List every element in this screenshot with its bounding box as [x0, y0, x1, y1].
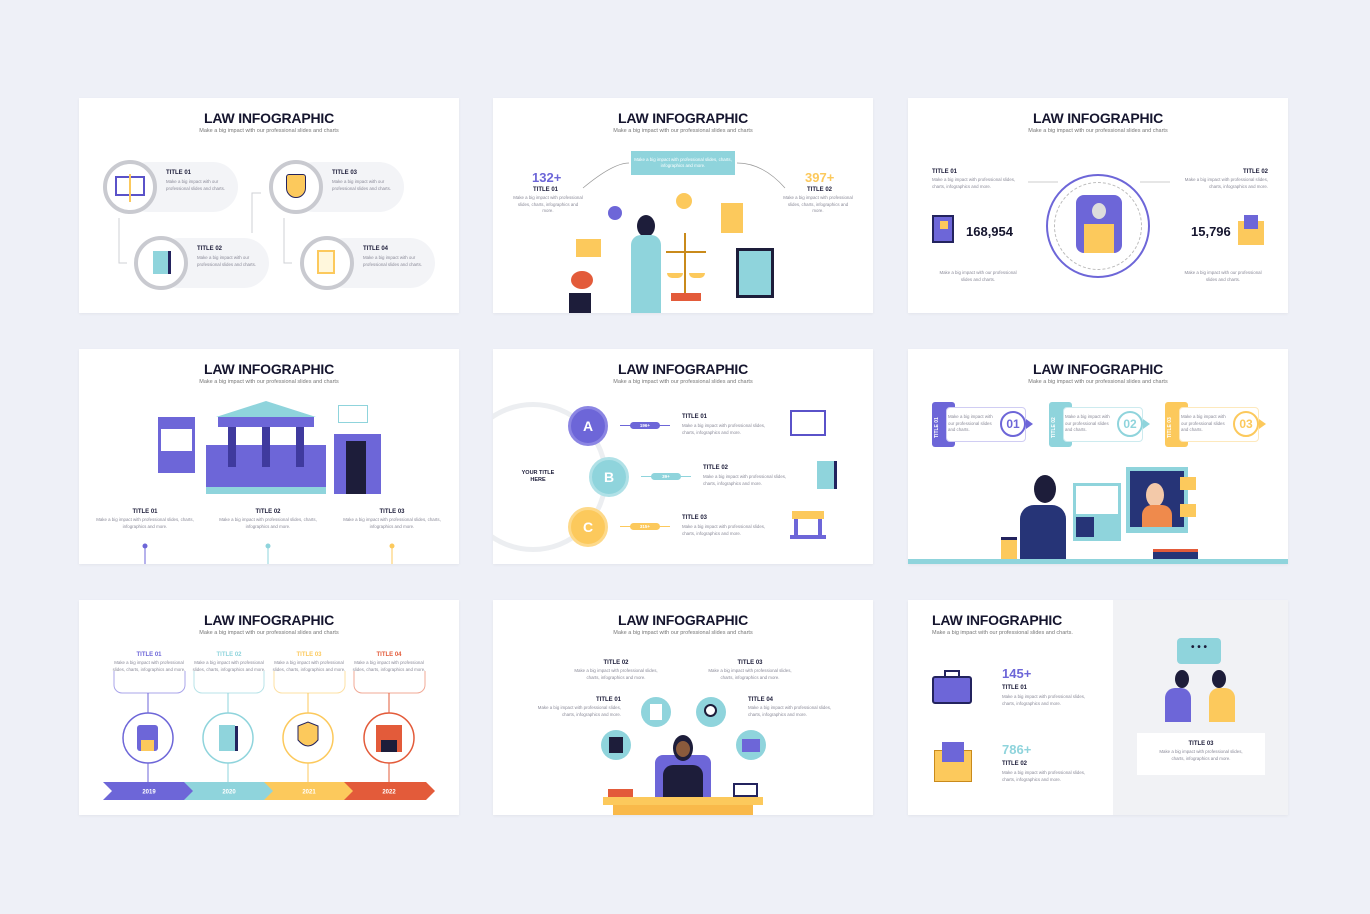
- text title 01: [538, 696, 621, 717]
- right grey panel: [1113, 600, 1289, 815]
- step 2: TITLE 02: [197, 246, 222, 252]
- subtitle: Make a big impact with our professional slides and charts: [1028, 128, 1168, 134]
- text title 04: TITLE 04: [748, 697, 773, 703]
- card 01: TITLE 01: [934, 417, 940, 438]
- item C: Make a big impact with professional slides, charts, infographics and more.: [682, 524, 765, 536]
- item 3: [343, 508, 441, 529]
- step 3: Make a big impact with our professional slides and charts.: [332, 179, 391, 191]
- card title 03: TITLE 03: [1188, 741, 1214, 747]
- illustration: lady justice: [569, 193, 774, 313]
- illustration: lawyer and screens: [1001, 467, 1198, 559]
- stat 1: [932, 666, 1085, 706]
- stat 2: [934, 742, 1085, 782]
- title: LAW INFOGRAPHIC: [618, 361, 748, 377]
- stat 2: TITLE 02: [1002, 761, 1027, 767]
- slide 6: numbered cards: [908, 349, 1288, 564]
- text right: [1185, 168, 1268, 189]
- item A: Make a big impact with professional slides, charts, infographics and more.: [682, 423, 765, 435]
- step 3: TITLE 03: [332, 170, 357, 176]
- stat left: [513, 170, 583, 213]
- stat right: 397+: [805, 170, 834, 185]
- timeline graphics: [103, 671, 435, 800]
- item B: 39+: [662, 474, 670, 479]
- stat right: TITLE 02: [807, 187, 832, 193]
- item A: [568, 406, 826, 446]
- step 4: [300, 236, 435, 290]
- item B: B: [604, 469, 614, 485]
- subtitle: Make a big impact with our professional slides and charts: [613, 128, 753, 134]
- item A: A: [583, 418, 593, 434]
- subtitle: Make a big impact with our professional slides and charts: [199, 128, 339, 134]
- card 02: [1049, 402, 1150, 447]
- item B: TITLE 02: [703, 465, 728, 471]
- subtitle: Make a big impact with our professional slides and charts: [613, 379, 753, 385]
- item 1: TITLE 01: [132, 509, 158, 515]
- slide 3: statistics: Make a big impact with our professional slides and charts.: [1184, 270, 1262, 282]
- text title 04: [748, 696, 831, 717]
- card 02: Make a big impact with our professional slides and charts.: [1065, 414, 1110, 432]
- subtitle: Make a big impact with our professional slides and charts: [199, 379, 339, 385]
- card 01: 01: [1006, 417, 1020, 431]
- center label: HERE: [530, 477, 546, 483]
- text 2: TITLE 02: [216, 652, 242, 658]
- text title 01: TITLE 01: [596, 697, 621, 703]
- top callout box: [631, 151, 735, 175]
- stat left: TITLE 01: [533, 187, 558, 193]
- text title 02: TITLE 02: [603, 660, 628, 666]
- top callout box: Make a big impact with professional slides, charts, infographics and more.: [634, 157, 732, 168]
- stat 2: [1191, 215, 1264, 245]
- subtitle: Make a big impact with our professional slides and charts: [1028, 379, 1168, 385]
- icon circles: [601, 697, 766, 760]
- step 2: [134, 236, 269, 290]
- text 4: TITLE 04: [376, 652, 402, 658]
- text 4: Make a big impact with professional slides, charts, infographics and more.: [353, 660, 425, 672]
- card 03: TITLE 03: [1167, 417, 1173, 438]
- item 1: Make a big impact with professional slides, charts, infographics and more.: [96, 517, 194, 529]
- text left: Make a big impact with professional slides, charts, infographics and more.: [932, 177, 1015, 189]
- slide 1: process steps: [79, 98, 459, 313]
- stat 1: [932, 215, 1013, 243]
- connectors: [118, 192, 292, 264]
- item C: [568, 507, 826, 547]
- timeline graphics: 2022: [382, 790, 396, 796]
- item C: TITLE 03: [682, 515, 707, 521]
- text 1: TITLE 01: [136, 652, 162, 658]
- item 3: Make a big impact with professional slides, charts, infographics and more.: [343, 517, 441, 529]
- timeline graphics: 2019: [142, 790, 156, 796]
- card title 03: [1137, 733, 1265, 775]
- stat 1: TITLE 01: [1002, 685, 1027, 691]
- text title 02: Make a big impact with professional slides, charts, infographics and more.: [574, 668, 658, 680]
- text 1: Make a big impact with professional slides, charts, infographics and more.: [113, 660, 185, 672]
- text title 03: TITLE 03: [737, 660, 762, 666]
- text left: [932, 168, 1015, 189]
- title: LAW INFOGRAPHIC: [618, 110, 748, 126]
- item C: 315+: [640, 524, 650, 529]
- title: LAW INFOGRAPHIC: [204, 361, 334, 377]
- card 02: 02: [1123, 417, 1137, 431]
- card 01: Make a big impact with our professional slides and charts.: [948, 414, 993, 432]
- step 2: Make a big impact with our professional slides and charts.: [197, 255, 256, 267]
- ring: [458, 402, 608, 552]
- text title 03: [708, 660, 792, 680]
- timeline graphics: 2021: [302, 790, 316, 796]
- step 4: Make a big impact with our professional slides and charts.: [363, 255, 422, 267]
- timeline graphics: 2020: [222, 790, 236, 796]
- stat 2: Make a big impact with professional slides, charts, infographics and more.: [1002, 770, 1085, 782]
- step 1: TITLE 01: [166, 170, 191, 176]
- text 4: [352, 652, 425, 672]
- text right: TITLE 02: [1243, 169, 1268, 175]
- title: LAW INFOGRAPHIC: [1033, 110, 1163, 126]
- item C: C: [583, 519, 593, 535]
- stat 1: 168,954: [966, 224, 1013, 239]
- slide 4: courthouse: [79, 349, 459, 564]
- step 3: [269, 160, 404, 214]
- title: LAW INFOGRAPHIC: [932, 612, 1062, 628]
- step 4: TITLE 04: [363, 246, 388, 252]
- stat right: Make a big impact with professional slides, charts, infographics and more.: [783, 195, 853, 213]
- slide 8: judge: [493, 600, 873, 815]
- text left: TITLE 01: [932, 169, 957, 175]
- item 1: [96, 508, 194, 529]
- stat left: Make a big impact with professional slides, charts, infographics and more.: [513, 195, 583, 213]
- text title 02: [574, 660, 658, 680]
- text 2: [192, 652, 265, 672]
- slide 7: timeline: [79, 600, 459, 815]
- illustration: courthouse: [158, 401, 381, 494]
- item B: Make a big impact with professional slides, charts, infographics and more.: [703, 474, 786, 486]
- card 01: [932, 402, 1033, 447]
- slide 3: statistics: [908, 98, 1288, 313]
- slide 9: stats with conversation: [908, 600, 1288, 815]
- slide 5: ABC list: [493, 349, 873, 564]
- stat left: 132+: [532, 170, 561, 185]
- stat 1: 145+: [1002, 666, 1031, 681]
- step 1: Make a big impact with our professional slides and charts.: [166, 179, 225, 191]
- center label: YOUR TITLE: [522, 470, 554, 476]
- item 3: TITLE 03: [379, 509, 404, 515]
- item 2: [219, 508, 317, 529]
- title: LAW INFOGRAPHIC: [204, 110, 334, 126]
- card 03: 03: [1239, 417, 1253, 431]
- title: LAW INFOGRAPHIC: [1033, 361, 1163, 377]
- text title 03: Make a big impact with professional slides, charts, infographics and more.: [708, 668, 792, 680]
- text 3: [272, 652, 345, 672]
- card title 03: Make a big impact with professional slides, charts, infographics and more.: [1159, 749, 1243, 761]
- item 2: TITLE 02: [255, 509, 280, 515]
- text title 01: Make a big impact with professional slides, charts, infographics and more.: [538, 705, 621, 717]
- card 03: [1165, 402, 1266, 447]
- center label: [522, 470, 554, 483]
- subtitle: Make a big impact with our professional slides and charts: [199, 630, 339, 636]
- stat 1: Make a big impact with professional slides, charts, infographics and more.: [1002, 694, 1085, 706]
- item A: 196+: [640, 423, 650, 428]
- item B: [589, 457, 837, 497]
- title: LAW INFOGRAPHIC: [204, 612, 334, 628]
- right grey panel: • • •: [1191, 642, 1207, 653]
- arcs: [582, 162, 786, 188]
- illustration: judge at desk: [603, 735, 763, 815]
- subtitle: Make a big impact with our professional slides and charts.: [932, 630, 1073, 636]
- text 3: Make a big impact with professional slides, charts, infographics and more.: [273, 660, 345, 672]
- step 1: [103, 160, 238, 214]
- card 02: TITLE 02: [1051, 417, 1057, 438]
- item 2: Make a big impact with professional slides, charts, infographics and more.: [219, 517, 317, 529]
- card 03: Make a big impact with our professional slides and charts.: [1181, 414, 1226, 432]
- text title 04: Make a big impact with professional slides, charts, infographics and more.: [748, 705, 831, 717]
- text 3: TITLE 03: [296, 652, 322, 658]
- stat right: [783, 170, 853, 213]
- captions: Make a big impact with our professional slides and charts.: [939, 270, 1017, 282]
- text right: Make a big impact with professional slides, charts, infographics and more.: [1185, 177, 1268, 189]
- slide 2: justice figure: [493, 98, 873, 313]
- stat 2: 15,796: [1191, 224, 1231, 239]
- center circle: [1046, 174, 1150, 278]
- text 2: Make a big impact with professional slides, charts, infographics and more.: [193, 660, 265, 672]
- stat 2: 786+: [1002, 742, 1031, 757]
- subtitle: Make a big impact with our professional slides and charts: [613, 630, 753, 636]
- title: LAW INFOGRAPHIC: [618, 612, 748, 628]
- bottom strip: [908, 559, 1290, 564]
- item A: TITLE 01: [682, 414, 707, 420]
- text 1: [112, 652, 185, 672]
